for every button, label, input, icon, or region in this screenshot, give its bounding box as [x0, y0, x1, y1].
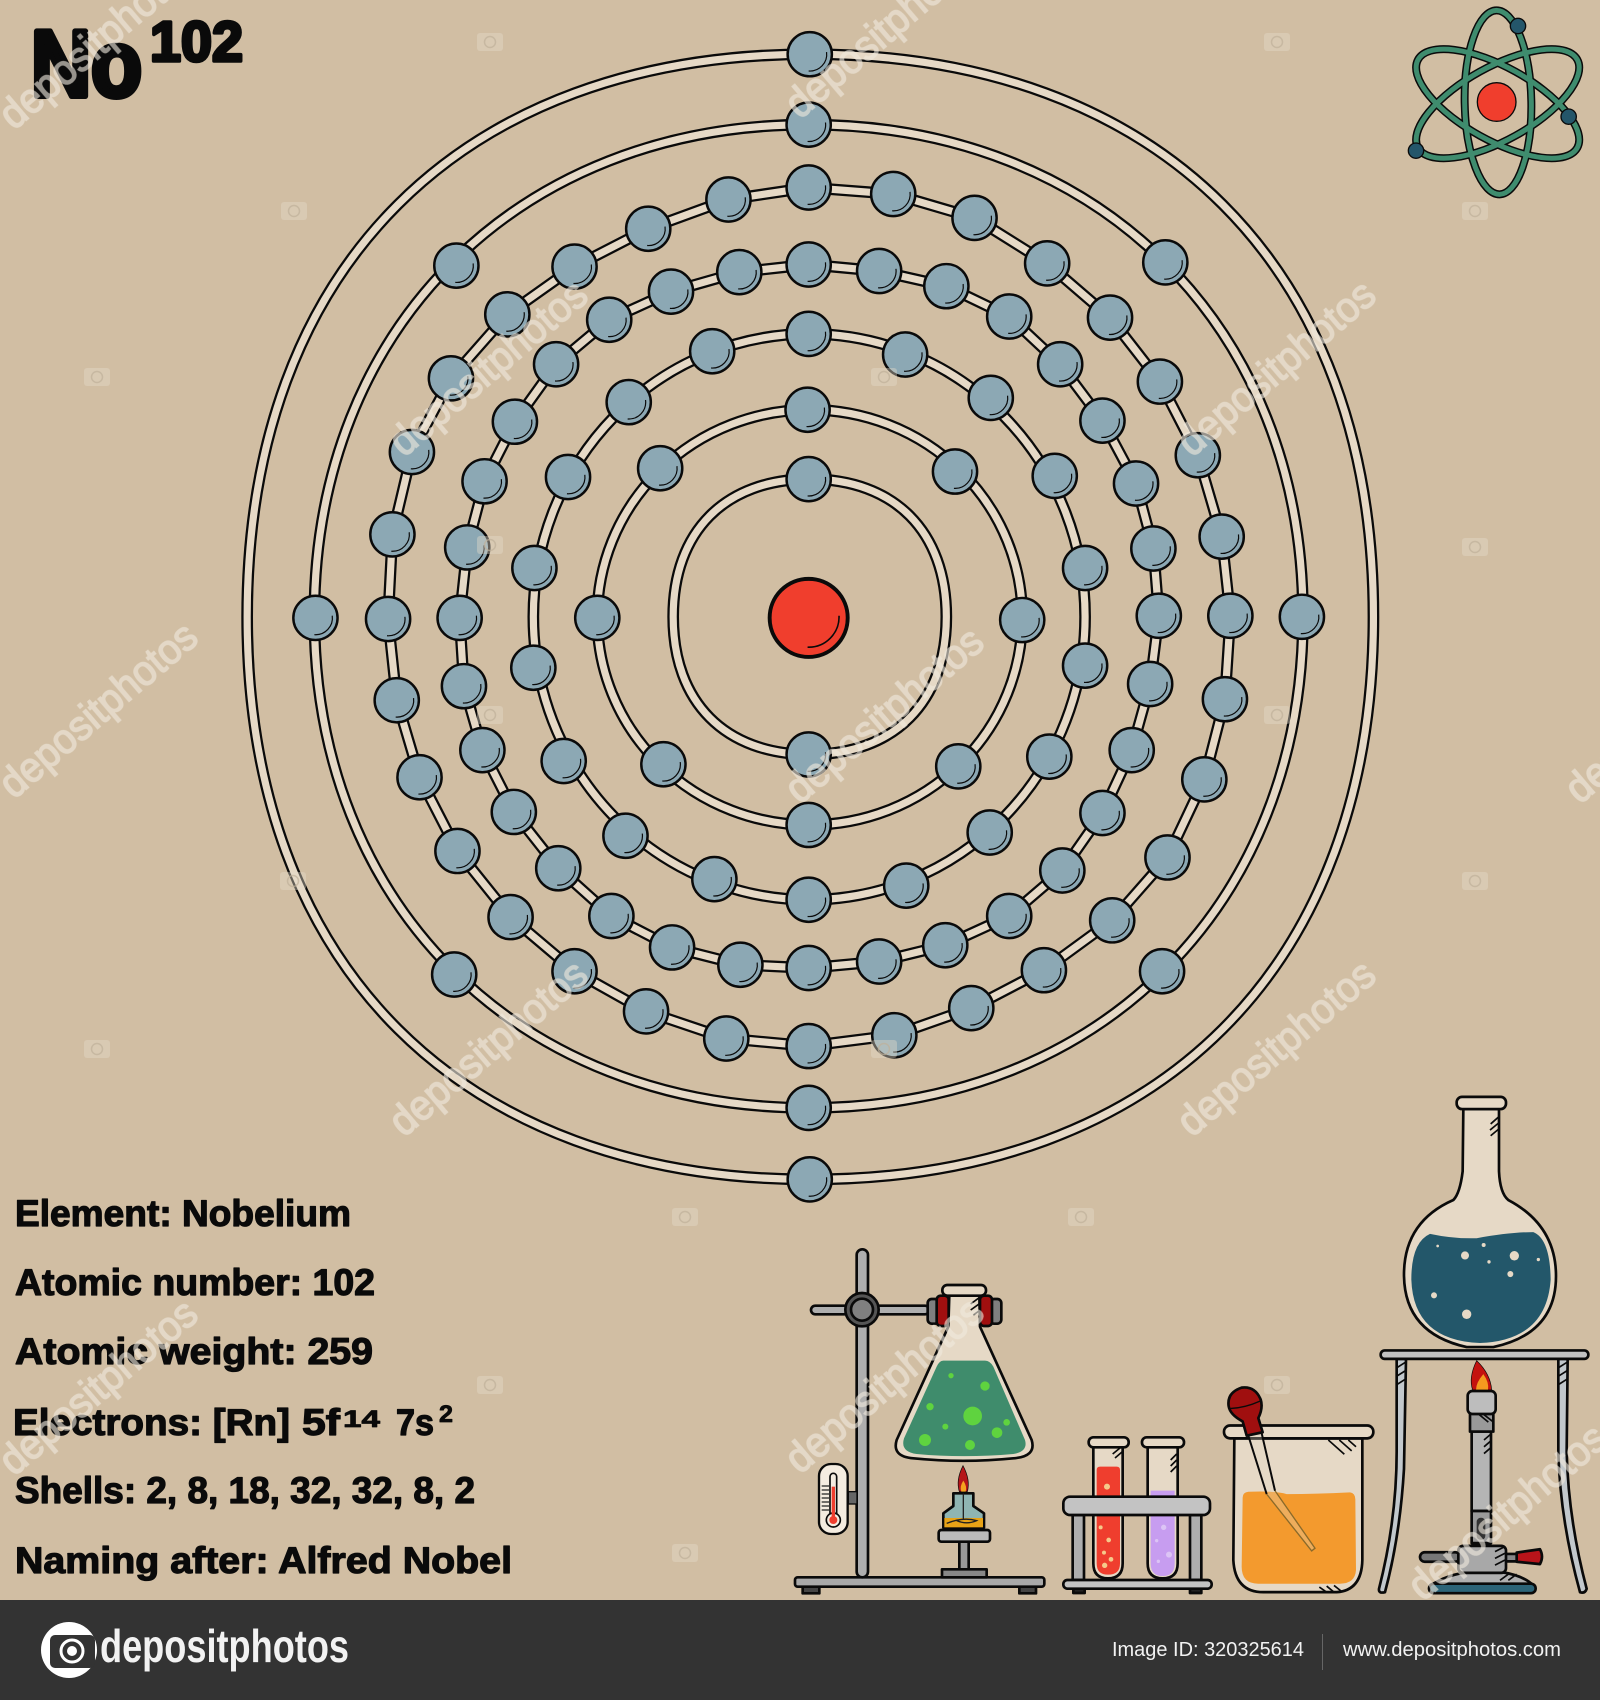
- fact: electrons: 5f: [302, 1402, 341, 1443]
- fact: electrons: 2: [439, 1401, 453, 1428]
- fact: shells: Shells: 2, 8, 18, 32, 32, 8, 2: [15, 1470, 475, 1511]
- fact: electrons: 14: [343, 1406, 381, 1433]
- watermark: stock photo overlay: depositphotos: [379, 950, 596, 1145]
- bunsen burner: [1420, 1361, 1542, 1593]
- electrons: shell 1: [787, 457, 831, 777]
- nucleus: [770, 579, 848, 657]
- clamp jaws: [928, 1296, 1001, 1326]
- fact: element: Element: Nobelium: [15, 1193, 351, 1234]
- title: element symbol: No: [31, 11, 142, 116]
- footer bar: [0, 1600, 1600, 1700]
- atom diagram: [247, 32, 1373, 1202]
- footer logo icon: [41, 1622, 97, 1678]
- electrons: shell 7: [788, 32, 832, 1202]
- thermometer: [819, 1464, 857, 1534]
- fact: electrons: [13, 1401, 453, 1443]
- shell rings: [247, 54, 1373, 1179]
- icon: round flask, beaker and bunsen burner: [1224, 1097, 1588, 1593]
- watermark: stock photo overlay: depositphotos: [775, 617, 992, 812]
- fact: electrons: Electrons: [Rn]: [13, 1402, 290, 1443]
- alcohol burner: [939, 1466, 990, 1577]
- conical flask: [896, 1285, 1033, 1461]
- icon: atom: [1400, 10, 1595, 195]
- website url: www.depositphotos.com: [1342, 1639, 1561, 1661]
- test tube: purple: [1142, 1437, 1184, 1578]
- stand rod and clamp: [811, 1249, 929, 1577]
- title: element symbol: [31, 10, 243, 116]
- test tube rack: [1063, 1437, 1212, 1593]
- electrons: shell 3: [511, 312, 1107, 922]
- stand base: [795, 1577, 1044, 1593]
- beaker with orange liquid: [1224, 1425, 1373, 1592]
- electrons: shell 2: [575, 388, 1044, 847]
- pipette: [1228, 1387, 1315, 1551]
- fact: electrons: 7s: [396, 1402, 434, 1443]
- image id: Image ID: 320325614: [1112, 1639, 1304, 1661]
- electrons: shell 5: [366, 165, 1252, 1068]
- watermark: stock photo overlay: depositphotos: [775, 1287, 992, 1482]
- fact: naming: Naming after: Alfred Nobel: [15, 1540, 512, 1581]
- watermark: stock photo overlay: depositphotos: [379, 270, 596, 465]
- icon: retort stand with conical flask and burner: [795, 1249, 1212, 1593]
- footer logo wordmark: depositphotos: [100, 1620, 349, 1672]
- element facts text block: [13, 1193, 512, 1581]
- electrons: shell 6: [293, 103, 1324, 1130]
- watermark: stock photo overlay: depositphotos: [1167, 950, 1384, 1145]
- title: element symbol: 102: [150, 10, 243, 74]
- test tube: red: [1089, 1437, 1129, 1578]
- watermark: stock photo overlay: depositphotos: [1167, 270, 1384, 465]
- fact: atomic weight: Atomic weight: 259: [15, 1331, 373, 1372]
- round bottom flask: [1404, 1097, 1556, 1347]
- fact: atomic number: Atomic number: 102: [15, 1262, 375, 1303]
- tripod stand: [1379, 1350, 1588, 1593]
- electrons: shell 4: [438, 242, 1181, 990]
